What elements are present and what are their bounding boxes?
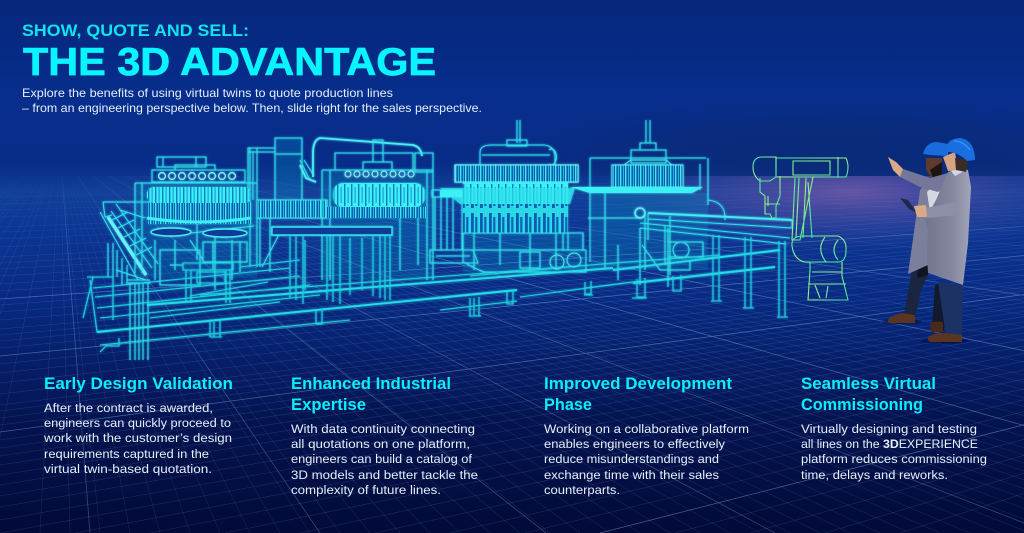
body: early design validation: work with the customer’s design xyxy=(43,431,232,445)
body: early design validation: engineers can quickly proceed to xyxy=(44,416,231,430)
engineer in front with tablet xyxy=(900,138,975,344)
bright carousel body xyxy=(147,187,251,203)
body: seamless virtual commissioning: platform reduces commissioning xyxy=(801,452,987,466)
body: enhanced industrial expertise: engineers can build a catalog of xyxy=(291,452,473,466)
intro text: Explore the benefits of using virtual twins to quote production lines xyxy=(22,86,393,100)
large domed machine three xyxy=(440,120,586,272)
panel: enhanced industrial expertise xyxy=(291,375,478,497)
body: seamless virtual commissioning: Virtually designing and testing xyxy=(801,422,977,436)
pointing sleeve and hand xyxy=(900,169,948,192)
perspective floor grid xyxy=(0,150,1024,533)
main title: THE 3D ADVANTAGE xyxy=(23,41,436,84)
body: enhanced industrial expertise xyxy=(291,422,478,497)
body: enhanced industrial expertise: 3D models and better tackle the xyxy=(291,468,478,482)
intro text xyxy=(22,86,482,115)
heading: enhanced industrial expertise: Expertise xyxy=(291,396,366,414)
base frame and floor rails xyxy=(83,250,780,352)
body: improved development phase: Working on a collaborative platform xyxy=(544,422,749,436)
body: early design validation: virtual twin-based quotation. xyxy=(44,462,212,476)
body: improved development phase: enables engineers to effectively xyxy=(544,437,726,451)
heading block xyxy=(22,21,482,115)
body: improved development phase: exchange time with their sales xyxy=(544,468,719,482)
body: improved development phase: reduce misunderstandings and xyxy=(544,452,719,466)
heading: early design validation: Early Design Validation xyxy=(44,375,233,393)
robot arm xyxy=(753,157,848,300)
machine four xyxy=(570,120,725,280)
body: enhanced industrial expertise: complexity of future lines. xyxy=(291,483,441,497)
tower, piping and transfer bed xyxy=(248,138,422,272)
right conveyor xyxy=(640,213,792,317)
engineers in hard hats xyxy=(882,138,975,344)
small front table xyxy=(183,263,268,303)
engineer behind, pointing xyxy=(882,142,948,324)
heading: seamless virtual commissioning: Seamless Virtual xyxy=(801,375,936,393)
panel: early design validation xyxy=(43,375,233,476)
production line wireframe xyxy=(83,120,792,360)
body: improved development phase: counterparts. xyxy=(544,483,620,497)
body: improved development phase xyxy=(544,422,749,497)
panel: improved development phase xyxy=(544,375,749,497)
body: seamless virtual commissioning: all lines on the 3DEXPERIENCE xyxy=(801,437,978,451)
body: enhanced industrial expertise: With data continuity connecting xyxy=(291,422,475,436)
heading: improved development phase xyxy=(544,375,733,414)
heading: enhanced industrial expertise: Enhanced Industrial xyxy=(291,375,451,393)
panel: seamless virtual commissioning xyxy=(801,375,987,482)
carousel machine two with table xyxy=(240,140,478,304)
carousel machine one xyxy=(120,148,268,303)
body: seamless virtual commissioning xyxy=(801,422,987,482)
heading: improved development phase: Improved Development xyxy=(544,375,733,393)
intro text: – from an engineering perspective below. Then, slide right for the sales perspective. xyxy=(22,101,482,115)
left conveyor and legs xyxy=(100,202,158,360)
bright carousel body two xyxy=(333,183,425,207)
body: early design validation: After the contract is awarded, xyxy=(44,401,213,415)
body: early design validation xyxy=(43,401,232,476)
kicker title: SHOW, QUOTE AND SELL: xyxy=(22,21,249,40)
heading: improved development phase: Phase xyxy=(544,396,592,414)
body: seamless virtual commissioning: time, delays and reworks. xyxy=(801,468,948,482)
heading: seamless virtual commissioning xyxy=(801,375,936,414)
heading: seamless virtual commissioning: Commissioning xyxy=(801,396,923,414)
body: early design validation: requirements captured in the xyxy=(44,447,209,461)
heading: enhanced industrial expertise xyxy=(291,375,451,414)
bright collar of machine three xyxy=(440,188,575,204)
body: enhanced industrial expertise: all quotations on one platform, xyxy=(291,437,470,451)
